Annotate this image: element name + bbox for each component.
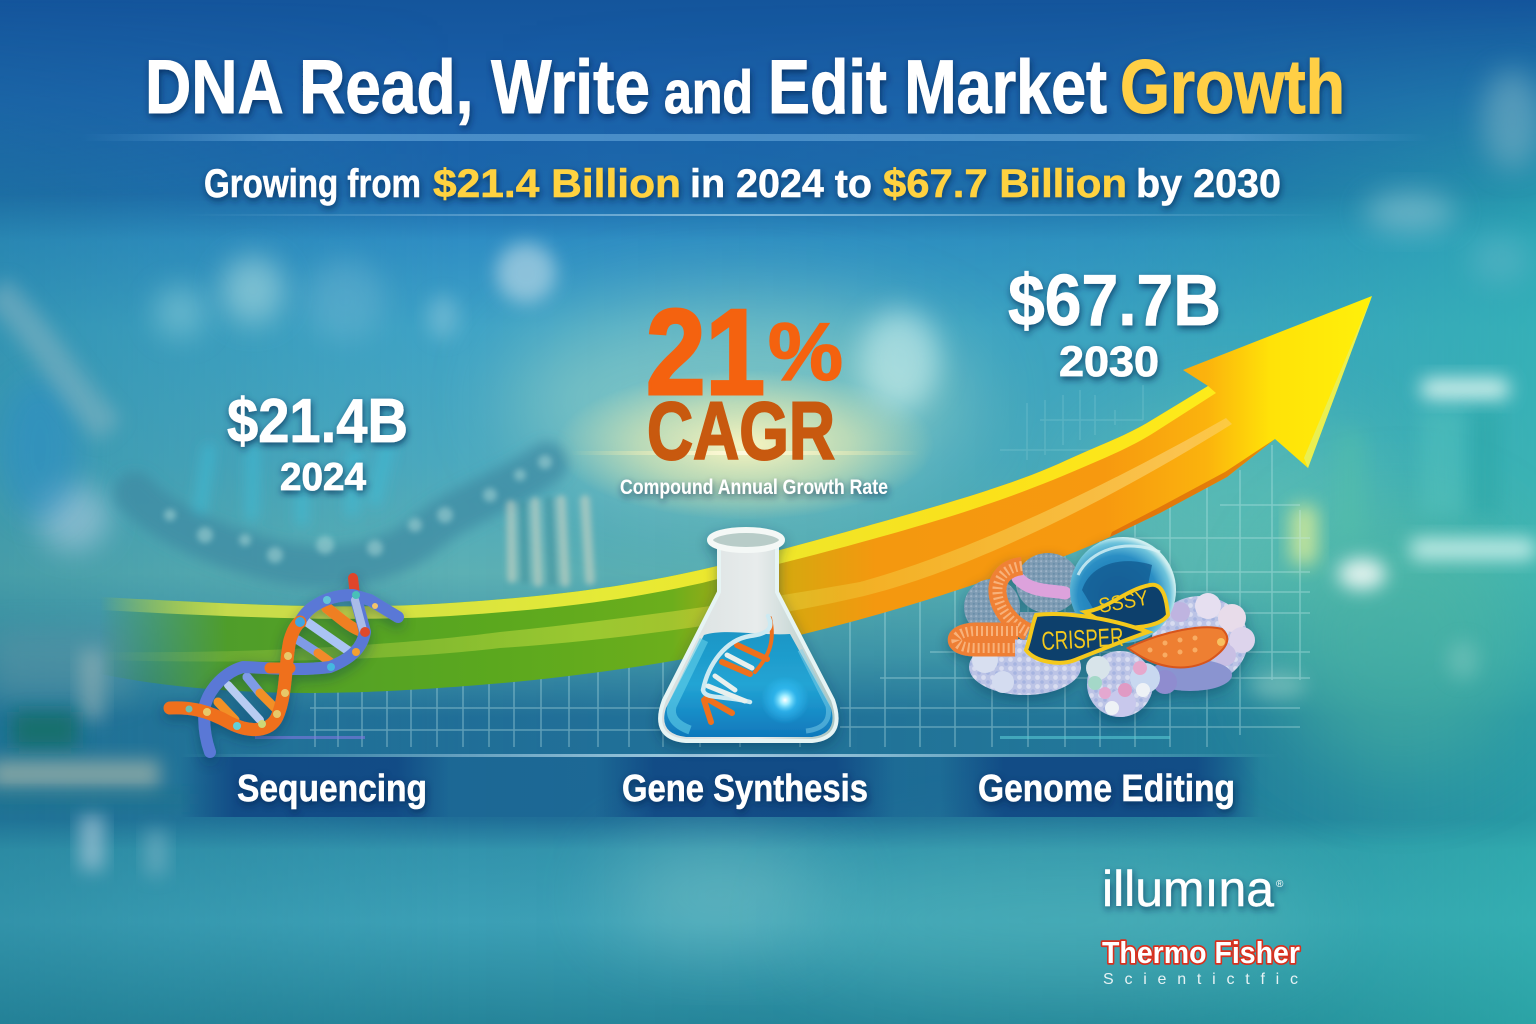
- icon: CRISPR molecular cluster: SSSY: [1097, 587, 1150, 618]
- icon: CRISPR molecular cluster: CRISPER: [1041, 622, 1124, 656]
- end value 2030: 2030: [1059, 338, 1159, 386]
- blurred lab backdrop right: [1250, 70, 1536, 699]
- flask glass: [660, 546, 837, 741]
- grey blue clusters: [964, 579, 1020, 635]
- CAGR callout: %: [768, 307, 843, 398]
- title: [145, 45, 1345, 130]
- icon: flask with DNA: [660, 530, 837, 741]
- logo: Thermo Fisher Scientific: Thermo Fisher: [1102, 935, 1300, 970]
- lower left cloud: [969, 639, 1081, 695]
- flask spark: [761, 676, 809, 724]
- orange rings: [997, 566, 1028, 632]
- logo: Thermo Fisher Scientific: Scientictfic: [1103, 971, 1298, 988]
- arrow body: [100, 296, 1372, 693]
- title: Edit Market: [768, 45, 1107, 130]
- start value 2024: [227, 387, 408, 499]
- icon: CRISPR molecular cluster: [956, 537, 1255, 717]
- logo: illumina: illumına: [1102, 861, 1274, 917]
- end value 2030: $67.7B: [1008, 261, 1221, 341]
- subtitle: [204, 162, 1281, 206]
- subtitle: in 2024 to: [690, 162, 872, 206]
- segment labels: Gene Synthesis: [622, 768, 868, 810]
- flask helix: [703, 616, 772, 722]
- CAGR percentage: 21: [646, 284, 765, 420]
- chart grid: [310, 385, 1310, 747]
- CAGR callout: [555, 284, 940, 520]
- start value 2024: $21.4B: [227, 387, 408, 456]
- CRISPR banner back: [1085, 585, 1168, 628]
- subtitle: by 2030: [1136, 162, 1281, 206]
- title: and: [664, 59, 753, 126]
- right cloud: [1152, 596, 1248, 684]
- blurred lab backdrop left: [0, 630, 190, 875]
- CAGR caption: Compound Annual Growth Rate: [620, 476, 888, 499]
- segment labels: Sequencing: [237, 768, 427, 810]
- title rule: [80, 134, 1430, 141]
- blurred DNA backdrop: [0, 243, 590, 582]
- bottom cluster: [1087, 651, 1153, 717]
- logo: illumina: ®: [1276, 879, 1284, 890]
- subtitle: $67.7 Billion: [883, 162, 1127, 206]
- arrow head edge highlight: [1304, 296, 1372, 468]
- subtitle rule: [180, 214, 1330, 216]
- arrow inner streak: [100, 418, 1232, 662]
- arrow top highlight: [100, 386, 1216, 619]
- logo: Thermo Fisher Scientific: [1102, 935, 1300, 988]
- orange enzyme: [1128, 627, 1227, 667]
- subtitle: $21.4 Billion: [433, 162, 681, 206]
- segment labels: Genome Editing: [978, 768, 1235, 810]
- icon: DNA helix: [170, 578, 398, 752]
- label band: [180, 736, 1280, 817]
- flask liquid: [664, 632, 832, 737]
- CRISPR banner front: [1026, 614, 1148, 663]
- title: DNA Read, Write: [145, 45, 650, 130]
- subtitle: Growing from: [204, 162, 421, 206]
- sphere: [1070, 537, 1176, 643]
- growth arrow: [100, 296, 1372, 693]
- pink ribbon: [1018, 578, 1065, 593]
- start value 2024: 2024: [280, 456, 366, 499]
- segment labels: [237, 768, 1235, 810]
- title: Growth: [1120, 45, 1345, 130]
- helix beads: [186, 591, 378, 730]
- CAGR word: CAGR: [647, 386, 835, 477]
- end value 2030: [1008, 261, 1221, 386]
- arrow underside edge: [1110, 439, 1275, 537]
